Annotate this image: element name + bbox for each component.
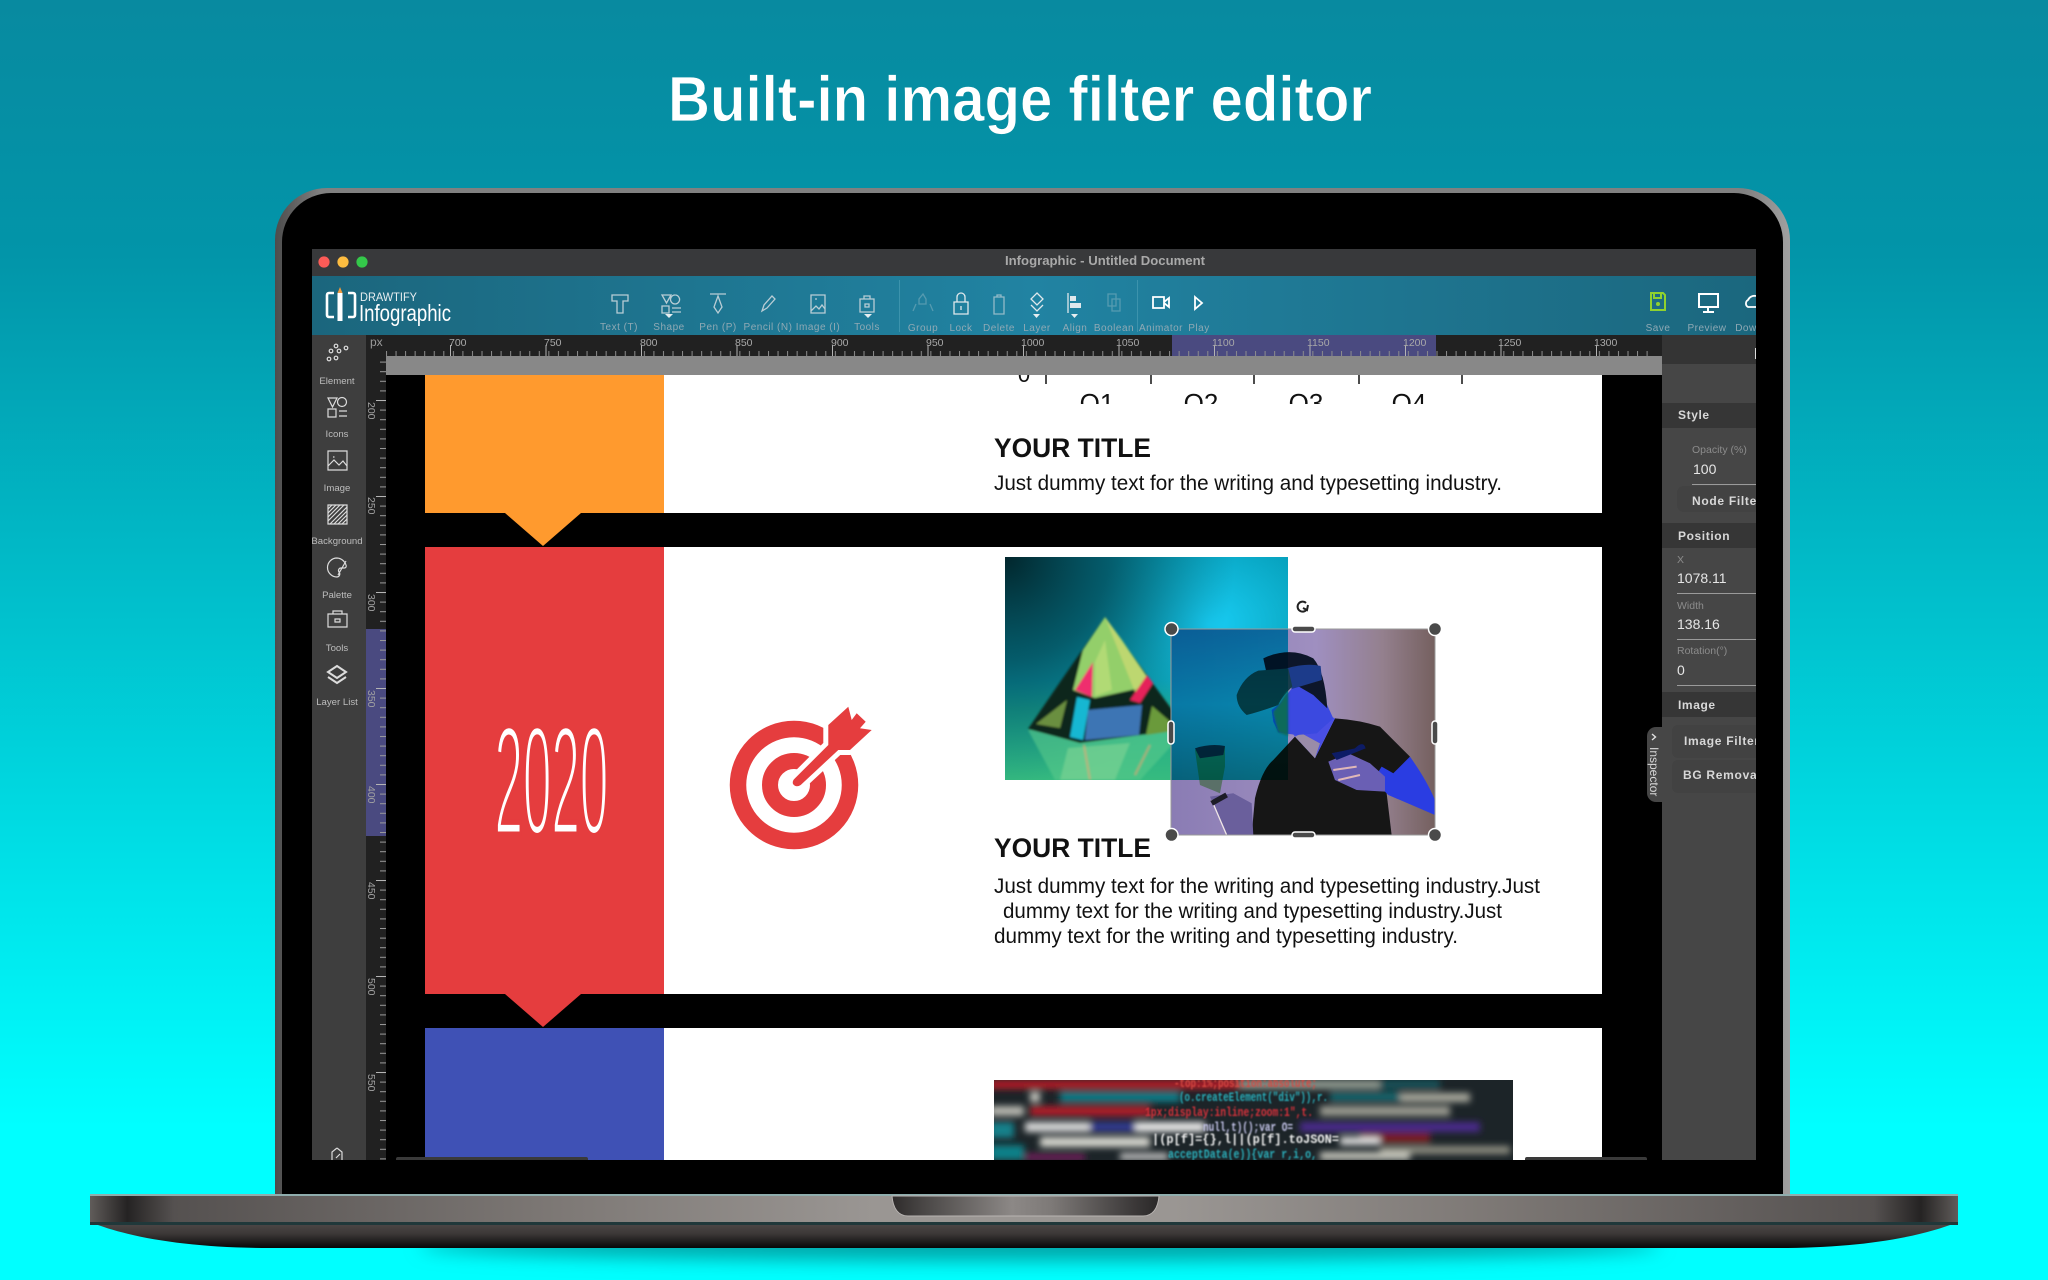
logo <box>327 287 451 326</box>
toolbar labels: Down <box>1735 323 1763 334</box>
forearm <box>1210 793 1253 835</box>
horizontal ruler: px <box>370 335 383 349</box>
horizontal ruler: 1100 <box>1212 337 1235 349</box>
toolbar labels: Preview <box>1687 323 1727 334</box>
horizontal ruler <box>366 335 1662 356</box>
panel: red 2020 <box>425 547 1602 1027</box>
horizontal ruler: 1050 <box>1116 337 1140 349</box>
left sidebar <box>311 335 366 1160</box>
hair <box>1263 652 1327 708</box>
section: position: 0 <box>1677 662 1685 678</box>
laptop base <box>90 1194 1958 1248</box>
image: blurred code <box>990 1076 1513 1162</box>
vertical ruler <box>365 356 386 1160</box>
toolbar labels: Boolean <box>1094 323 1134 334</box>
wrist band <box>1212 795 1227 803</box>
toolbar labels: Shape <box>653 322 685 333</box>
chart axis fragment: 0 <box>1018 362 1030 387</box>
laptop lid <box>275 188 1790 1196</box>
chart axis fragment <box>1018 375 1463 404</box>
right controller <box>1332 744 1366 760</box>
infographic document <box>425 327 1602 1162</box>
toolbar arrows <box>665 314 1078 318</box>
body text: dummy text for the writing and typesetting industry. <box>994 925 1458 948</box>
face <box>1272 686 1333 735</box>
bottom tabs <box>396 1157 1647 1160</box>
toolbar labels: Play <box>1188 323 1210 334</box>
toolbar <box>312 276 1763 335</box>
vertical ruler: 400 <box>365 786 377 804</box>
section: image <box>1662 692 1772 793</box>
title bar: Infographic - Untitled Document <box>1005 253 1206 268</box>
inspector tab <box>1647 727 1662 802</box>
section: position: 1078.11 <box>1677 570 1727 586</box>
horizontal ruler: 1250 <box>1498 337 1522 349</box>
section: position: 138.16 <box>1677 616 1720 632</box>
overlap: photos blended <box>1171 629 1288 780</box>
icon: target with arrow <box>738 707 872 841</box>
toolbar labels: Tools <box>854 322 880 333</box>
body text <box>994 875 1540 948</box>
section: position: Rotation(°) <box>1677 645 1727 657</box>
vertical ruler: 500 <box>365 978 377 996</box>
grey canvas margin <box>386 356 1662 375</box>
code text: 1px;display:inline;zoom:1",t. <box>1145 1105 1313 1120</box>
logo: DRAWTIFY <box>360 292 417 304</box>
horizontal ruler: 800 <box>640 337 658 349</box>
sidebar labels <box>311 376 363 708</box>
horizontal ruler: 900 <box>831 337 849 349</box>
vertical ruler: 200 <box>365 402 377 420</box>
horizontal ruler: 1000 <box>1021 337 1045 349</box>
right arm <box>1373 757 1435 815</box>
section: position: Position <box>1678 529 1730 543</box>
toolbar labels: Lock <box>949 323 973 334</box>
laptop <box>90 188 1958 1248</box>
section: image: Image Filter <box>1684 734 1760 748</box>
face teal <box>1273 690 1288 736</box>
vertical ruler: 450 <box>365 882 377 900</box>
body text: Just dummy text for the writing and typesetting industry. <box>994 472 1502 495</box>
code text: null,t)();var O= <box>1203 1120 1293 1135</box>
sidebar icons <box>327 344 348 1160</box>
code text: -top:1%;position:absolute; <box>1174 1076 1317 1091</box>
headset strap <box>1287 665 1322 689</box>
image: VR man <box>1165 602 1442 842</box>
title: Built-in image filter editor <box>668 63 1372 135</box>
vertical ruler: 550 <box>365 1074 377 1092</box>
toolbar labels: Pencil (N) <box>744 322 792 333</box>
vertical ruler: 250 <box>365 497 377 515</box>
chart axis fragment: Q3 <box>1289 388 1323 418</box>
toolbar labels: Image (I) <box>796 322 840 333</box>
horizontal ruler: 700 <box>449 337 467 349</box>
code text <box>1145 1076 1339 1162</box>
year: 2020 <box>494 696 608 868</box>
section: style: Style <box>1678 408 1710 422</box>
canvas area <box>386 327 1662 1162</box>
section: position: X <box>1677 554 1684 566</box>
body text: Just dummy text for the writing and typesetting industry.Just <box>994 875 1540 898</box>
sidebar labels: Palette <box>322 590 352 601</box>
rotate icon <box>1298 602 1308 612</box>
right hand <box>1328 753 1385 792</box>
sidebar labels: Image <box>324 483 350 494</box>
chart axis fragment: Q2 <box>1184 388 1218 418</box>
sidebar labels: Icons <box>326 429 349 440</box>
left hand <box>1195 747 1225 793</box>
inspector panel <box>1647 335 1772 1160</box>
sidebar labels: Element <box>319 376 355 387</box>
section: style: Opacity (%) <box>1692 444 1747 456</box>
shirt <box>1252 718 1410 835</box>
left controller <box>1195 745 1225 758</box>
heading: YOUR TITLE <box>994 433 1151 463</box>
toolbar labels: Save <box>1646 323 1670 334</box>
vertical ruler: 350 <box>365 690 377 708</box>
sidebar labels: Background <box>311 536 363 547</box>
code text: |(p[f]={},l||(p[f].toJSON= <box>1152 1132 1339 1147</box>
toolbar labels: Pen (P) <box>699 322 737 333</box>
neck <box>1294 717 1335 758</box>
panel: orange <box>425 362 1602 546</box>
sidebar labels: Tools <box>326 643 348 654</box>
code text: (o.createElement("div")),r. <box>1179 1090 1328 1105</box>
horizontal ruler: 750 <box>544 337 562 349</box>
chart axis fragment: Q4 <box>1392 388 1426 418</box>
base lower <box>90 1222 1958 1248</box>
code text: acceptData(e)){var r,i,o, <box>1168 1147 1317 1162</box>
section: image: Image <box>1678 698 1716 712</box>
horizontal ruler: 850 <box>735 337 753 349</box>
toolbar labels: Layer <box>1023 323 1051 334</box>
notch <box>892 1196 1159 1216</box>
section: image: BG Removal <box>1683 768 1761 782</box>
base upper <box>90 1194 1958 1223</box>
toolbar icons <box>612 293 1756 314</box>
vertical ruler: 300 <box>365 594 377 612</box>
section: style: 100 <box>1693 461 1717 477</box>
section: position <box>1662 523 1756 686</box>
toolbar dividers <box>900 280 1138 332</box>
heading: YOUR TITLE <box>994 833 1151 863</box>
selection frame <box>1165 602 1442 842</box>
body text: dummy text for the writing and typesetting industry.Just <box>1003 900 1502 923</box>
toolbar labels: Text (T) <box>600 322 638 333</box>
inspector tab: Inspector <box>1647 747 1661 796</box>
toolbar labels: Animator <box>1139 323 1183 334</box>
horizontal ruler: 950 <box>926 337 944 349</box>
section: style <box>1662 403 1767 512</box>
horizontal ruler: 1200 <box>1403 337 1427 349</box>
panel: blue <box>425 1028 1602 1162</box>
toolbar labels: Delete <box>983 323 1015 334</box>
sidebar labels: Layer List <box>316 697 358 708</box>
section: style: Node Filter <box>1692 494 1762 508</box>
headset visor <box>1237 668 1292 715</box>
chart axis fragment: Q1 <box>1080 388 1114 418</box>
toolbar labels: Group <box>908 323 938 334</box>
app window <box>311 249 1772 1162</box>
image: crystal pyramid <box>1005 557 1288 780</box>
laptop shadow <box>420 1231 1660 1261</box>
toolbar labels <box>600 322 1756 333</box>
horizontal ruler: 1150 <box>1307 337 1330 349</box>
section: position: Width <box>1677 600 1704 612</box>
logo: Infographic <box>359 300 451 326</box>
toolbar labels: Align <box>1063 323 1087 334</box>
title bar <box>312 249 1756 276</box>
horizontal ruler: 1300 <box>1594 337 1618 349</box>
